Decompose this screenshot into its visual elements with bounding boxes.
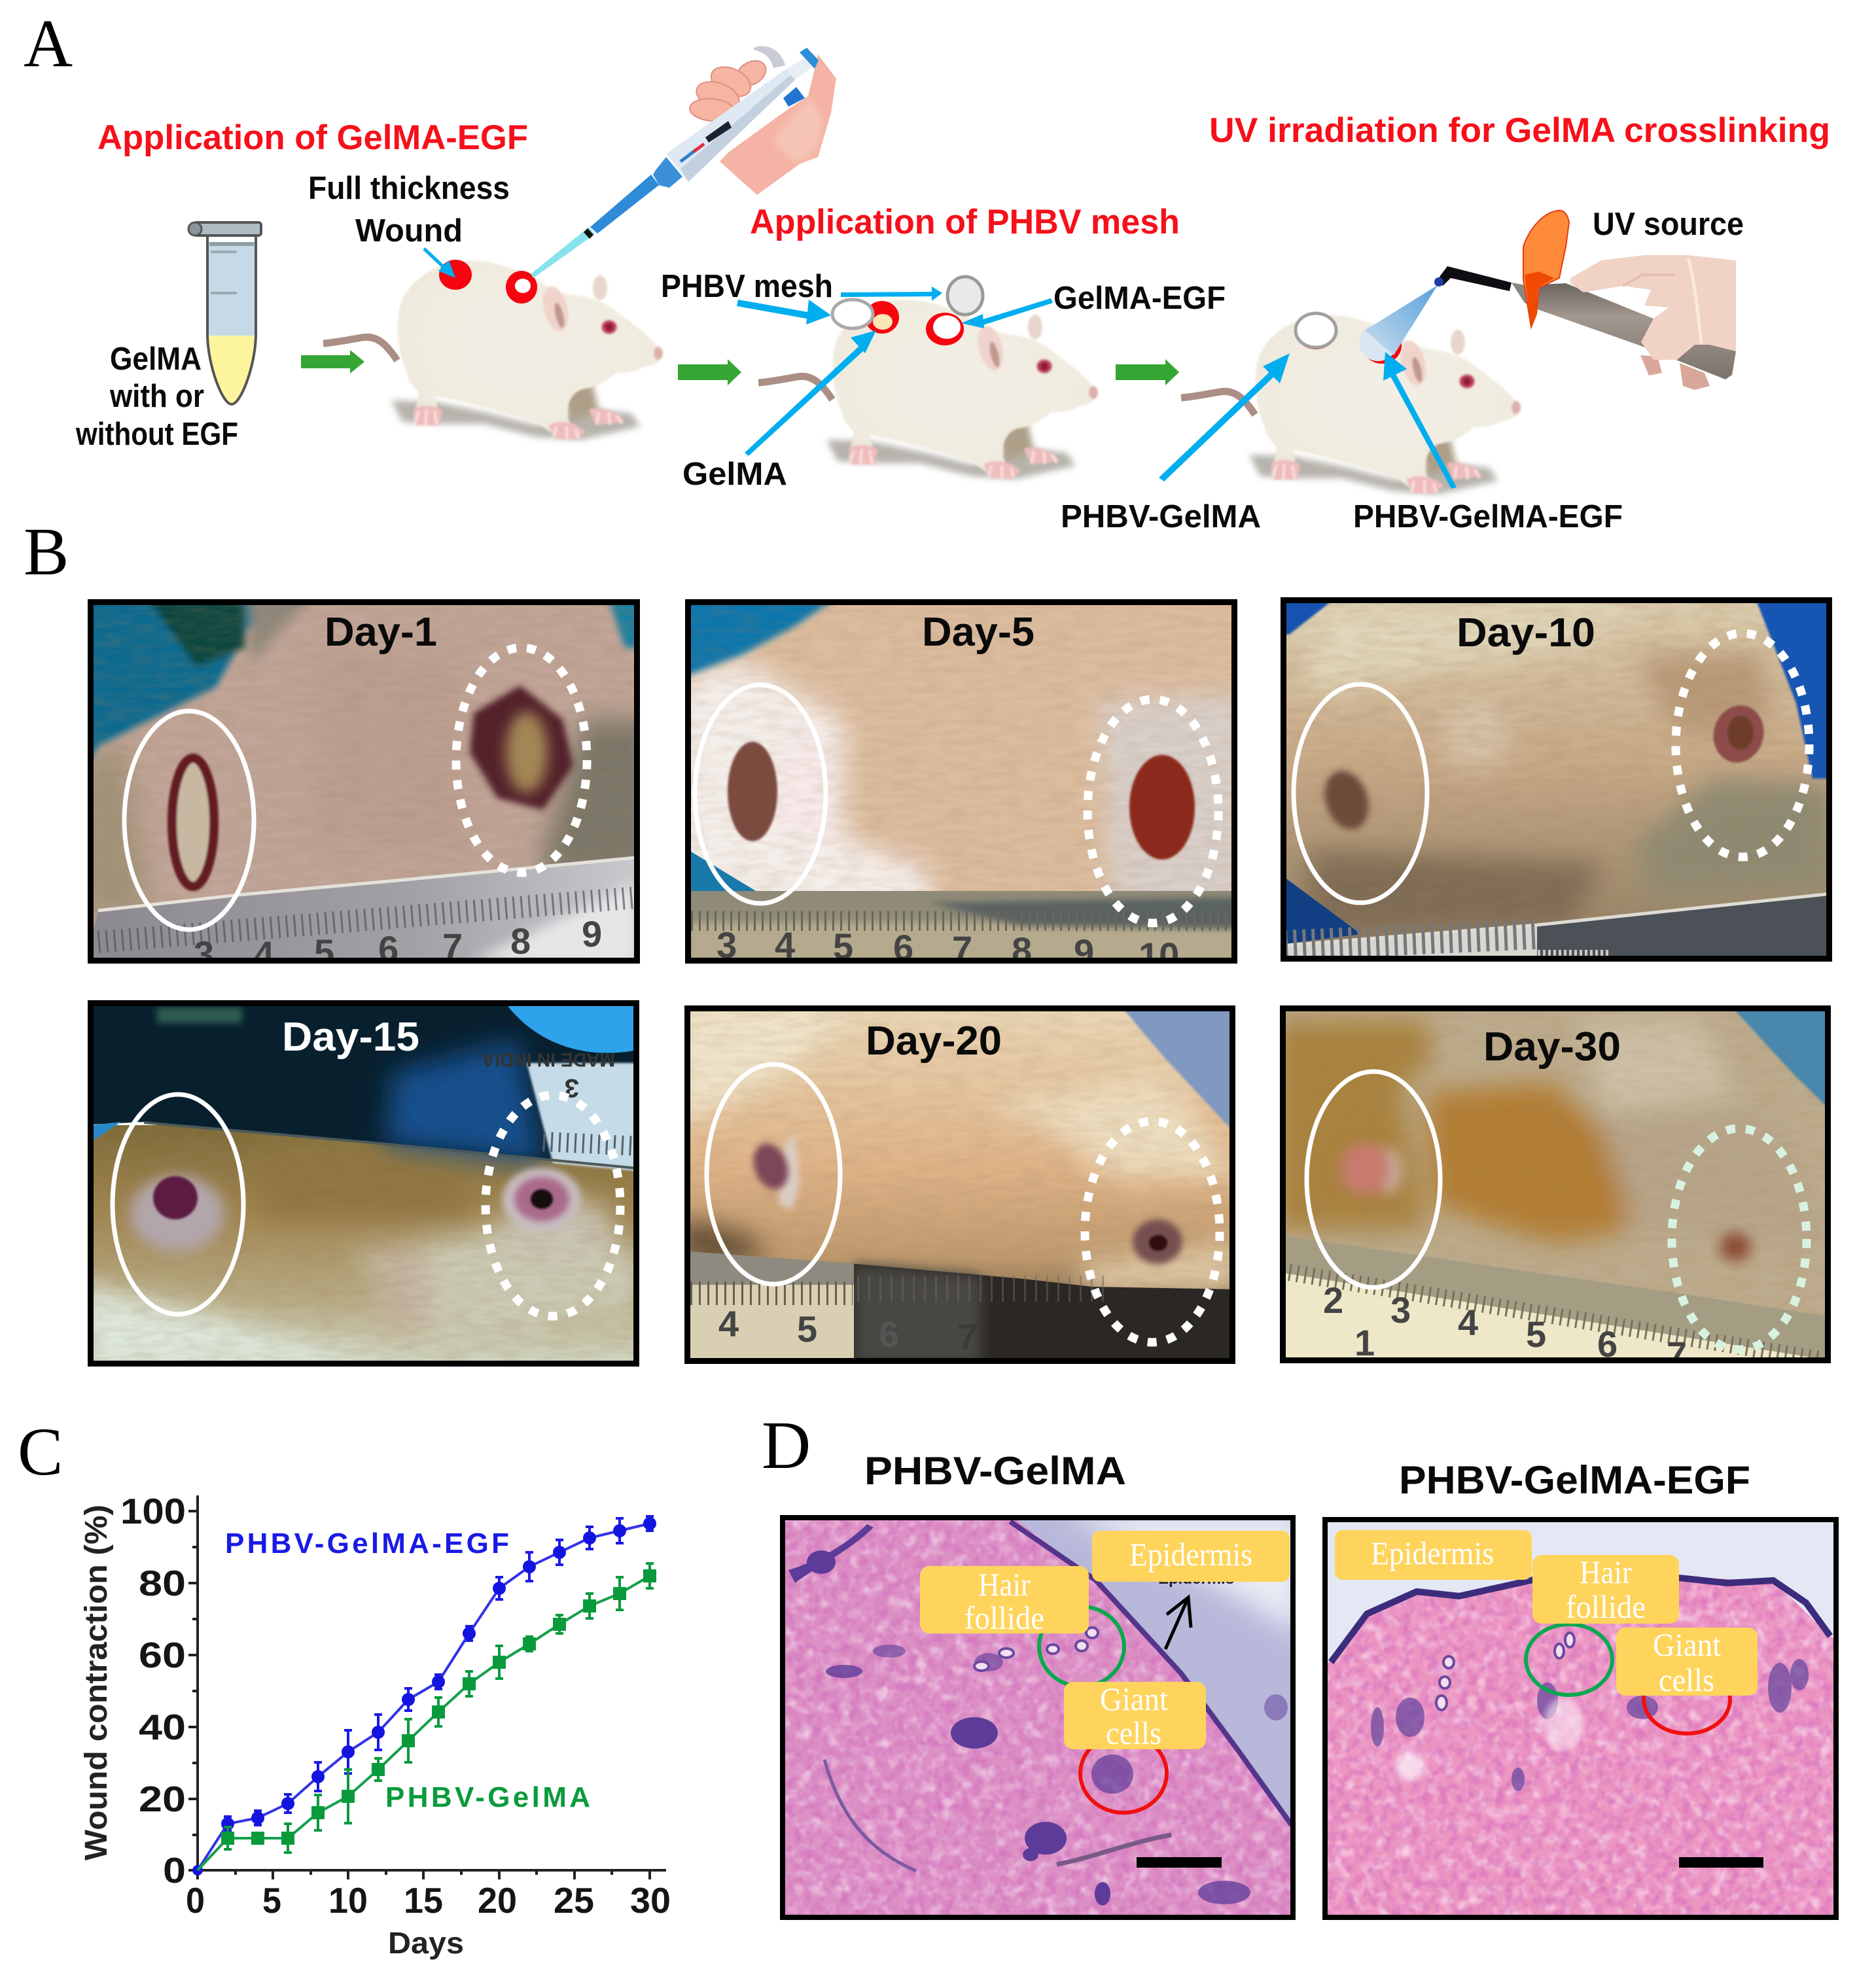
arrow: step 1 (301, 350, 364, 374)
series label: PHBV-GelMA-EGF: PHBV-GelMA-EGF (225, 1527, 509, 1560)
photo: Day-20: 6 (879, 1314, 899, 1355)
callout: Giant cells (1064, 1681, 1206, 1751)
photo: Day-1 (79, 589, 654, 975)
y tick labels: 0 (163, 1850, 186, 1891)
outline: solid ellipse (695, 685, 826, 903)
outline: solid ellipse (707, 1064, 840, 1284)
outline: solid ellipse (113, 1094, 243, 1314)
outline: solid ellipse (124, 711, 254, 930)
y tick labels: 80 (139, 1563, 186, 1603)
callout: Epidermis (1335, 1530, 1532, 1580)
photo frame (688, 602, 1234, 960)
photo frame (90, 1003, 636, 1363)
callout: Hair follide: Hair (1580, 1554, 1632, 1590)
photo: Day-1: 4 (254, 933, 274, 975)
rat 1 with wounds (323, 260, 663, 440)
photo: Day-1: 8 (510, 920, 531, 962)
x tick labels (186, 1880, 671, 1921)
y tick labels: 100 (120, 1491, 186, 1531)
wound: right site (470, 686, 573, 810)
arrow: step 3 (1116, 359, 1179, 385)
y tick labels: 40 (139, 1707, 186, 1747)
photo: Day-5: 6 (893, 927, 913, 968)
wound label (308, 171, 510, 249)
x tick labels: 25 (554, 1880, 594, 1921)
panel B: wound photographs (24, 514, 1839, 1375)
label: Day-15: Day-15 (282, 1015, 419, 1060)
histology: PHBV-GelMA: Epidermis (1158, 1570, 1234, 1588)
panel D: histology (762, 1408, 1839, 1923)
arrow: step 2 (678, 359, 741, 385)
photo: Day-5: 8 (1012, 930, 1032, 971)
wound: right site (503, 1168, 581, 1230)
icon: UV curing light held in gloved hand (1434, 211, 1736, 390)
panel A: procedure schematic (24, 6, 1830, 534)
label: PHBV-GelMA: PHBV-GelMA (1061, 499, 1261, 534)
wound: right site (1707, 700, 1770, 768)
icon: microtube (188, 222, 261, 404)
ring: giant cells (1080, 1734, 1167, 1813)
x axis title: Days (388, 1926, 464, 1960)
callout: Hair follide (1532, 1554, 1679, 1625)
outline: solid ellipse (1294, 684, 1427, 903)
photo: Day-1: 5 (314, 932, 334, 973)
callout: Giant cells: Giant (1100, 1681, 1168, 1717)
photo: Day-5: 4 (775, 924, 795, 966)
outline: dashed ellipse (1085, 1121, 1220, 1342)
photo: Day-1: 7 (442, 926, 463, 967)
wound: left site (1340, 1143, 1402, 1195)
histology: PHBV-GelMA (779, 1511, 1302, 1921)
photo: Day-30: 2 (1323, 1280, 1343, 1321)
x tick labels: 15 (404, 1880, 443, 1921)
photo frame (1284, 601, 1830, 959)
label: Day-1: Day-1 (325, 610, 437, 655)
photo: Day-30: 5 (1526, 1314, 1546, 1355)
wound: left site (1317, 765, 1376, 835)
photo: Day-20: 7 (957, 1316, 978, 1357)
ruler number: 3: 3 (565, 1073, 579, 1102)
series: PHBV-GelMA-EGF (192, 1516, 656, 1875)
arrows: mesh and GelMA pointers (737, 287, 1053, 456)
x tick labels: 30 (630, 1880, 671, 1921)
ring: hair follicle (1526, 1624, 1612, 1695)
tube label: with or (109, 379, 204, 414)
arrow: wound pointer (424, 249, 455, 278)
axes (188, 1495, 666, 1879)
photo: Day-30: 4 (1458, 1302, 1478, 1343)
callout: Giant cells (1616, 1626, 1758, 1698)
photo: Day-5: 5 (833, 926, 853, 967)
outline: dashed ellipse (1672, 1128, 1807, 1350)
tube label: GelMA (110, 341, 202, 377)
wound: left site (172, 758, 214, 886)
callout: Hair follide: follide (964, 1599, 1044, 1636)
heading: UV irradiation: UV irradiation for GelMA crosslinking (1209, 111, 1830, 150)
rat 2 with mesh and wounds (758, 300, 1098, 479)
photo: Day-30 (1276, 1001, 1839, 1375)
photo frame (90, 602, 637, 960)
y axis title: Wound contraction (%) (79, 1505, 114, 1860)
UV light cone (1365, 285, 1438, 355)
photo: Day-30: 7 (1667, 1334, 1687, 1375)
photo: Day-30: 3 (1390, 1289, 1411, 1331)
photo: Day-5: 3 (716, 924, 737, 966)
callout: Giant cells: Giant (1653, 1626, 1721, 1663)
outline: dashed ellipse (456, 648, 587, 873)
label: Day-20: Day-20 (866, 1019, 1002, 1064)
wound and mesh, right site (926, 277, 983, 345)
panel letter A: A (24, 6, 73, 81)
outline: solid ellipse (1307, 1072, 1440, 1287)
arrow: epidermis pointer (1165, 1597, 1191, 1649)
wound: left site (728, 742, 777, 841)
series: PHBV-GelMA (198, 1563, 656, 1870)
photo: Day-30: 1 (1354, 1322, 1375, 1363)
wound: right site (1720, 1232, 1751, 1261)
panel letter D: D (762, 1408, 811, 1483)
outline: dashed ellipse (1088, 699, 1218, 923)
title: PHBV-GelMA: PHBV-GelMA (864, 1449, 1126, 1493)
callout: Giant cells: cells (1659, 1662, 1714, 1698)
photo: Day-1: 9 (582, 913, 602, 954)
callout: Hair follide: follide (1566, 1588, 1646, 1625)
x tick labels: 20 (478, 1880, 517, 1921)
UV sites on rat 3 (1296, 313, 1402, 364)
ring: hair follicle (1039, 1607, 1124, 1686)
photo: Day-20 (681, 1001, 1243, 1364)
photo: Day-1: 3 (194, 933, 214, 975)
callout: Epidermis: Epidermis (1129, 1536, 1252, 1573)
label: Day-30: Day-30 (1483, 1024, 1621, 1070)
label: PHBV-GelMA-EGF: PHBV-GelMA-EGF (1353, 499, 1623, 534)
x tick labels: 5 (262, 1880, 281, 1921)
title: PHBV-GelMA-EGF: PHBV-GelMA-EGF (1399, 1458, 1750, 1502)
photo: Day-10 (1276, 589, 1839, 968)
label: GelMA-EGF: GelMA-EGF (1053, 281, 1226, 316)
y tick labels (120, 1491, 186, 1891)
arrows: PHBV-GelMA pointers (1159, 352, 1457, 489)
wound: left site (130, 1176, 224, 1251)
outline: dashed ellipse (1676, 633, 1809, 857)
wound: right site (1129, 755, 1195, 860)
ruler print: MADE IN INDIA: MADE IN INDIA (482, 1049, 615, 1070)
scale bar (1137, 1857, 1222, 1868)
callout: Hair follide (920, 1566, 1089, 1636)
ring: giant cells (1644, 1665, 1730, 1734)
x tick labels: 10 (328, 1880, 368, 1921)
callout: Epidermis (1092, 1531, 1290, 1582)
panel C: wound contraction chart (18, 1414, 671, 1960)
callout: Hair follide: Hair (978, 1566, 1031, 1603)
wound and mesh, left site (832, 300, 899, 334)
photo: Day-5: 9 (1074, 932, 1094, 973)
tube label (75, 341, 238, 452)
photo: Day-5: 7 (952, 928, 972, 969)
image frame (1325, 1520, 1836, 1917)
scale bar (1679, 1857, 1763, 1868)
heading: Application of PHBV mesh: Application of PHBV mesh (750, 203, 1180, 241)
image frame (783, 1518, 1293, 1917)
panel letter C: C (18, 1414, 63, 1490)
label: GelMA: GelMA (682, 457, 787, 492)
label: PHBV mesh: PHBV mesh (661, 269, 833, 304)
label: Day-10: Day-10 (1457, 610, 1595, 655)
outline: dashed ellipse (486, 1095, 620, 1316)
x tick labels: 0 (186, 1880, 205, 1921)
wound label: Full thickness (308, 171, 510, 206)
icon: hand with pipette (531, 46, 836, 278)
tube label: without EGF (75, 417, 238, 452)
label: Day-5: Day-5 (922, 610, 1035, 655)
photo: Day-5 (674, 589, 1250, 976)
callout: Giant cells: cells (1106, 1715, 1161, 1751)
callout: Epidermis: Epidermis (1371, 1535, 1494, 1571)
photo: Day-20: 5 (797, 1308, 817, 1350)
y tick labels: 60 (139, 1635, 186, 1675)
photo: Day-5: 10 (1139, 935, 1179, 976)
panel letter B: B (24, 514, 69, 589)
series label: PHBV-GelMA: PHBV-GelMA (385, 1781, 590, 1813)
label: UV source: UV source (1593, 207, 1744, 242)
heading: Application of GelMA-EGF: Application of GelMA-EGF (97, 118, 528, 157)
histology: PHBV-GelMA-EGF (1322, 1518, 1839, 1923)
photo: Day-30: 6 (1597, 1323, 1618, 1365)
photo frame (1282, 1009, 1828, 1361)
wound: right site (1133, 1219, 1182, 1264)
wound label: Wound (355, 213, 463, 249)
photo: Day-20: 4 (718, 1303, 739, 1344)
y tick labels: 20 (139, 1779, 186, 1819)
photo: Day-15 (79, 994, 654, 1374)
photo frame (687, 1009, 1233, 1361)
rat 3 with meshes (1181, 315, 1521, 494)
wound: left site (747, 1132, 800, 1210)
photo: Day-1: 6 (378, 928, 398, 969)
